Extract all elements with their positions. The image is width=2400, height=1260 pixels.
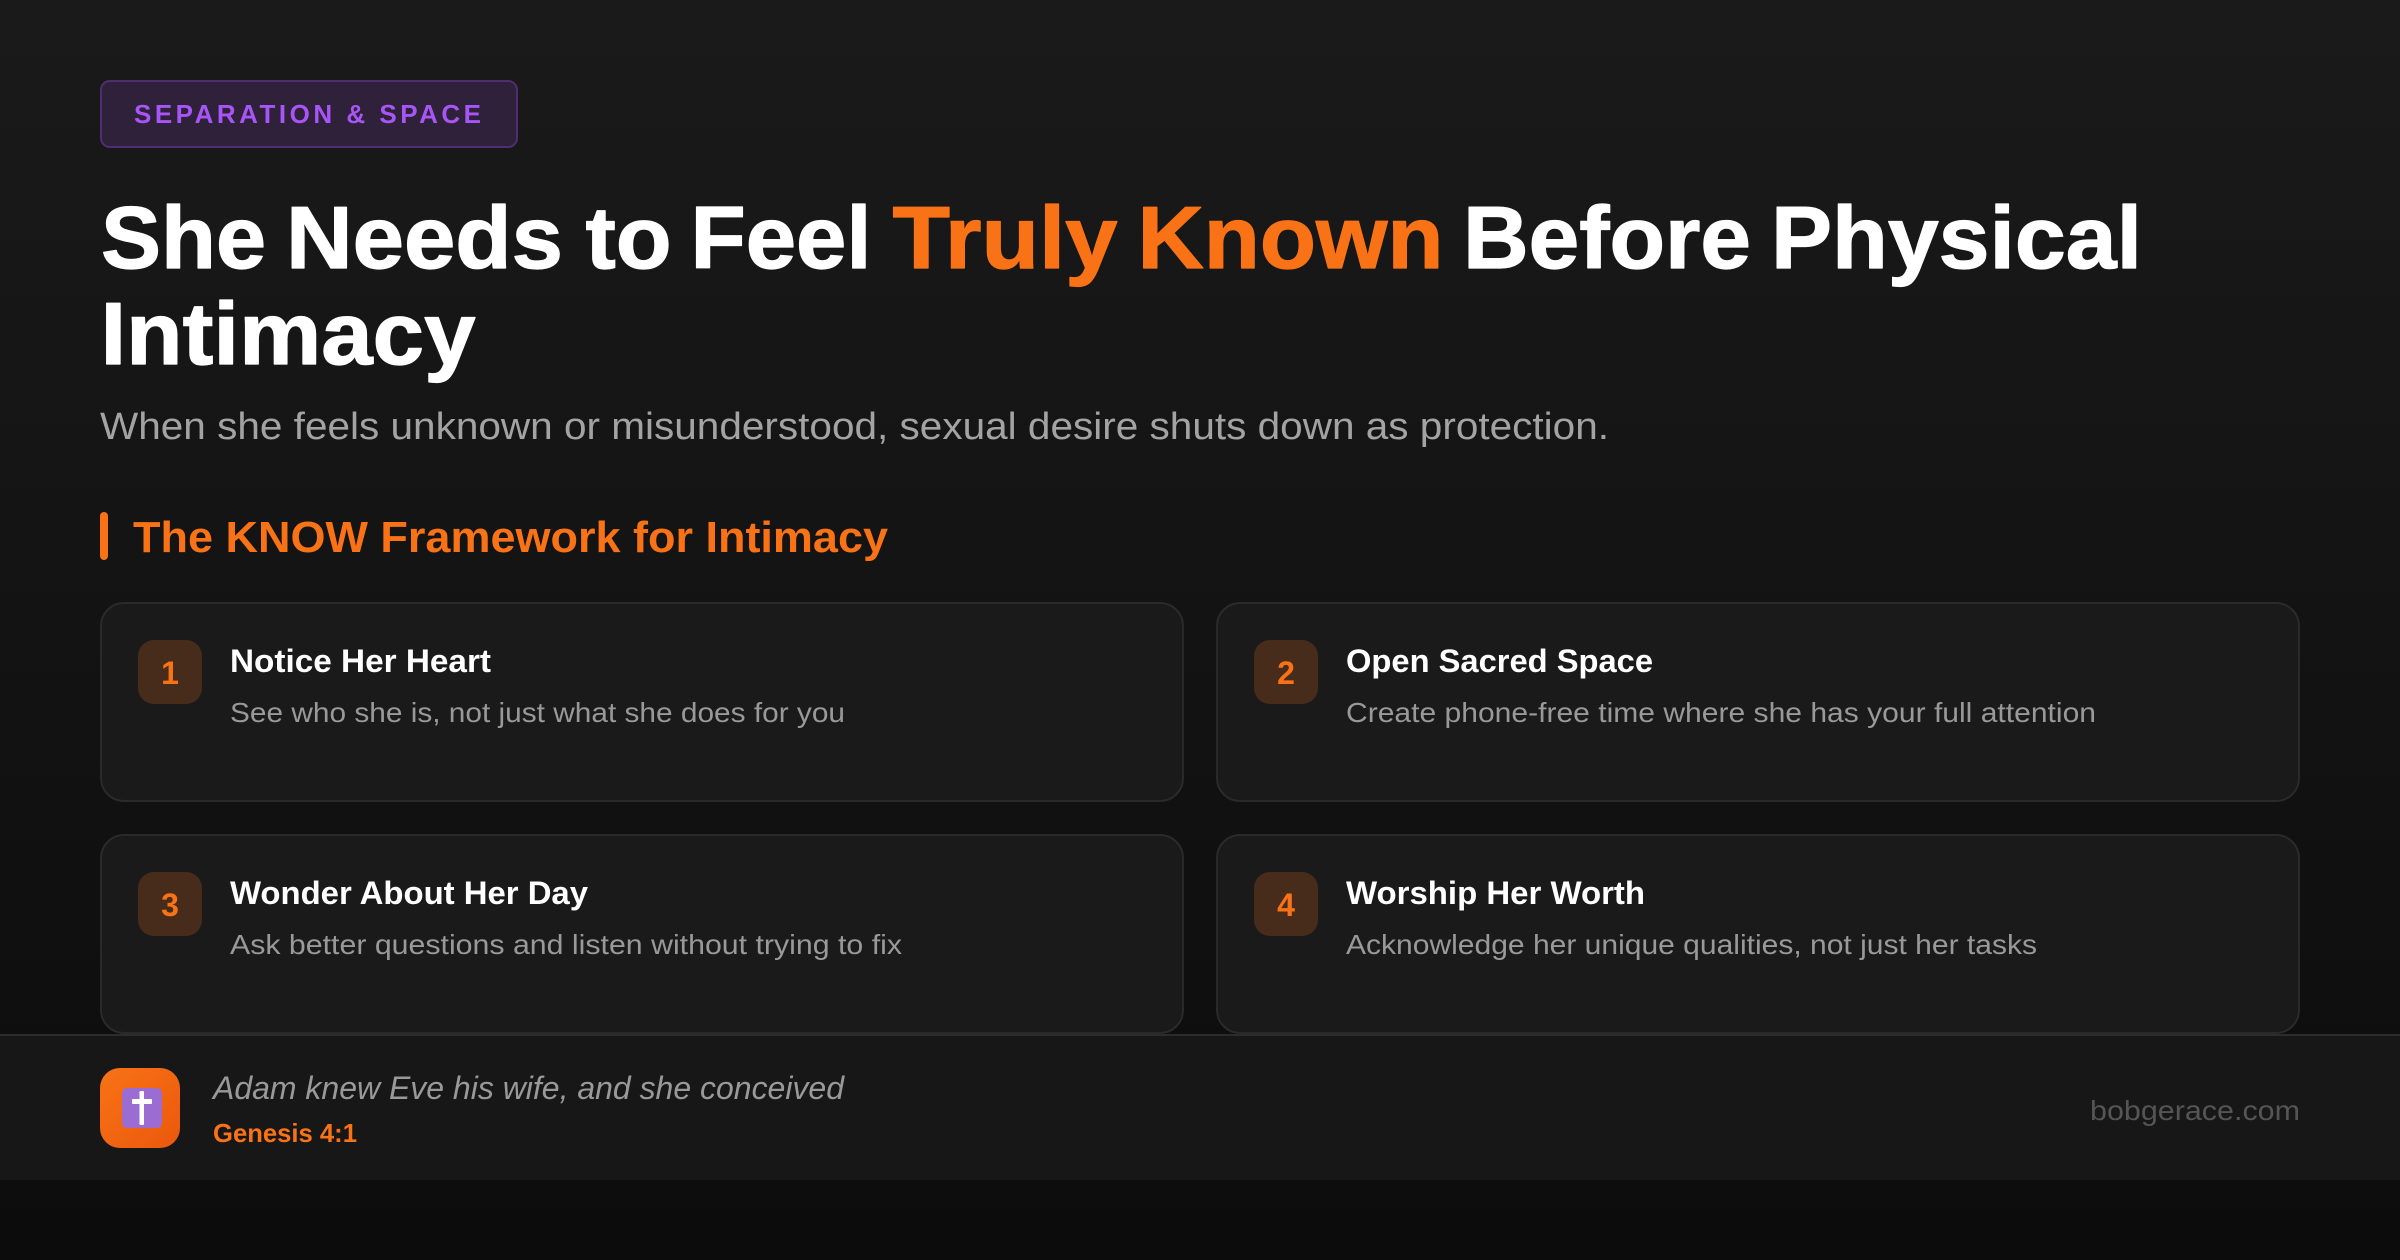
title: She — [101, 188, 266, 287]
title: Physical — [1771, 188, 2142, 287]
card 2 heading: Open Sacred Space — [1346, 643, 1653, 679]
title: Known — [1138, 188, 1444, 287]
card 1 description: See who she is, not just what she does for you — [230, 697, 845, 728]
card 2: open sacred space — [1217, 603, 2299, 801]
scripture quote: Adam knew Eve his wife, and she conceived — [211, 1070, 845, 1106]
number badge 2 — [1254, 640, 1318, 704]
number badge 1: 1 — [161, 655, 179, 691]
website: bobgerace.com — [2090, 1095, 2300, 1126]
badge: separation and space: SEPARATION & SPACE — [134, 99, 481, 129]
section heading: KNOW framework: The KNOW Framework for Intimacy — [133, 513, 889, 562]
number badge 1 — [138, 640, 202, 704]
number badge 2: 2 — [1277, 655, 1295, 691]
title: Feel — [690, 188, 872, 287]
scripture reference: Genesis 4:1 — [213, 1118, 357, 1148]
card 1: notice her heart — [101, 603, 1183, 801]
card 3 description: Ask better questions and listen without trying to fix — [230, 929, 902, 960]
card 4 description: Acknowledge her unique qualities, not just her tasks — [1346, 929, 2037, 960]
card 3: wonder about her day — [101, 835, 1183, 1033]
card 1 heading: Notice Her Heart — [230, 643, 491, 679]
number badge 3: 3 — [161, 887, 179, 923]
number badge 4 — [1254, 872, 1318, 936]
title — [100, 188, 2142, 383]
title: Intimacy — [100, 284, 476, 383]
number badge 4: 4 — [1277, 887, 1295, 923]
card 4: worship her worth — [1217, 835, 2299, 1033]
badge: separation and space — [101, 81, 517, 147]
card 2 description: Create phone-free time where she has your full attention — [1346, 697, 2096, 728]
card 3 heading: Wonder About Her Day — [230, 875, 588, 911]
footer bar — [0, 1034, 2400, 1180]
number badge 3 — [138, 872, 202, 936]
icon: cross — [100, 1068, 180, 1148]
title: Truly — [892, 188, 1118, 287]
title: Before — [1463, 188, 1751, 287]
title: to — [586, 188, 672, 287]
title: Needs — [286, 188, 563, 287]
card 4 heading: Worship Her Worth — [1346, 875, 1645, 911]
subtitle: When she feels unknown or misunderstood, sexual desire shuts down as protection. — [100, 406, 1609, 448]
